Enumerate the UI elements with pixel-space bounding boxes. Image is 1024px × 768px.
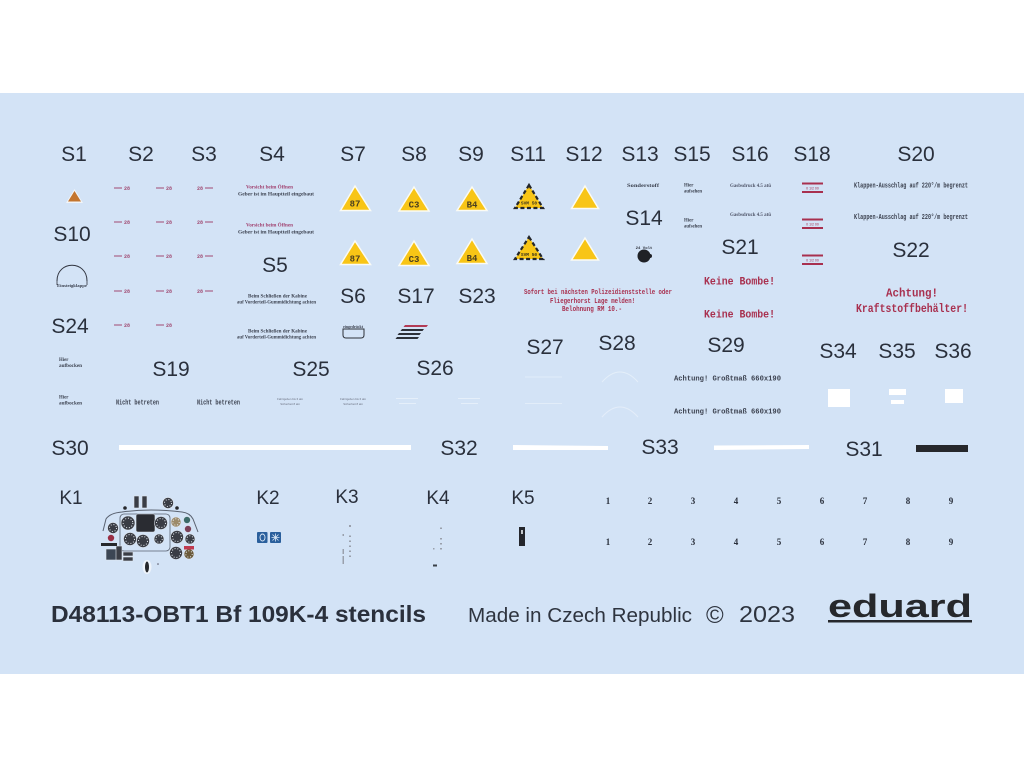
S23 red police notice: Sofort bei nächsten Polizeidienststelle oder	[524, 289, 672, 297]
S29 text: Achtung! Großtmaß 660x190	[674, 408, 781, 416]
item labels: S20	[897, 143, 935, 166]
item labels: S18	[793, 143, 831, 166]
item labels: K3	[335, 487, 359, 508]
S2 and S3 marks: 28	[197, 186, 203, 192]
item labels: S8	[401, 143, 427, 166]
item labels: S31	[845, 438, 883, 461]
S25 small text: Fahrtgeben bis 6 atü	[340, 397, 366, 401]
placard numbers: 9	[949, 496, 954, 506]
item labels: S17	[397, 285, 435, 308]
origin text: Made in Czech Republic	[468, 605, 692, 627]
S19 text	[116, 400, 240, 408]
item labels: S34	[819, 340, 857, 363]
placard numbers: 7	[863, 537, 868, 547]
item labels: S35	[878, 340, 916, 363]
S26 faint white text	[396, 398, 480, 404]
placard numbers	[606, 496, 954, 547]
copyright: ©	[706, 602, 724, 629]
S16 text: Gasbsdruck 4.5 atü	[730, 184, 771, 189]
item labels: S19	[152, 358, 190, 381]
item labels: S22	[892, 239, 930, 262]
S20 text	[854, 182, 968, 222]
S2 and S3 marks: 28	[166, 289, 172, 295]
S13 text: Sonderstoff	[627, 183, 659, 189]
S2 and S3 marks: 28	[166, 323, 172, 329]
item labels	[51, 143, 972, 509]
S7 S8 S9 fuel triangles: B4	[467, 254, 478, 264]
S15 text: Hier	[684, 218, 694, 224]
S2 and S3 marks: 28	[124, 254, 130, 260]
S2 and S3 marks: 28	[166, 254, 172, 260]
placard numbers: 6	[820, 496, 825, 506]
placard numbers: 9	[949, 537, 954, 547]
item labels: S27	[526, 336, 564, 359]
S2 and S3 marks: 28	[197, 289, 203, 295]
item labels: S24	[51, 315, 89, 338]
S16 text: Gasbsdruck 4.5 atü	[730, 213, 771, 218]
S34 S35 S36 white patches	[828, 389, 963, 407]
S10 canopy decal: Einsteigklappe	[57, 283, 87, 288]
S11 dashed triangles: SVM 50	[521, 252, 537, 258]
S7 S8 S9 fuel triangles: C3	[409, 200, 419, 210]
placard numbers: 5	[777, 537, 782, 547]
item labels: S29	[707, 334, 745, 357]
item labels: S6	[340, 285, 366, 308]
item labels: S10	[53, 223, 91, 246]
S10 canopy decal	[57, 265, 87, 288]
item labels: S13	[621, 143, 659, 166]
item labels: K1	[59, 488, 83, 509]
K2 blue dials	[257, 532, 281, 543]
placard numbers: 2	[648, 537, 653, 547]
S25 small text	[277, 397, 366, 406]
S6 canopy outline	[343, 324, 364, 338]
S24 text: Hier	[59, 396, 69, 400]
item labels: S1	[61, 143, 87, 166]
item labels: S16	[731, 143, 769, 166]
S19 text: Nicht betreten	[116, 400, 159, 408]
S29 text	[674, 376, 781, 416]
item labels: S12	[565, 143, 603, 166]
S18 red bars: 0 1/2 00	[806, 222, 819, 226]
S23 red police notice: Belohnung RM 10.-	[562, 306, 622, 314]
S23 red police notice: Fliegerhorst Lage melden!	[550, 298, 635, 306]
item labels: S7	[340, 143, 366, 166]
item labels: S36	[934, 340, 972, 363]
S5 canopy text: Beim Schließen der Kabine	[248, 330, 307, 334]
placard numbers: 2	[648, 496, 653, 506]
K4 small marks	[433, 528, 442, 566]
S4 warning text	[238, 184, 314, 236]
S7 S8 S9 fuel triangles: 87	[350, 254, 360, 264]
S7 S8 S9 fuel triangles: 87	[350, 200, 360, 210]
S31 black strip	[916, 445, 968, 452]
S4 warning text: Vorsicht beim Öffnen	[246, 184, 293, 190]
S5 canopy text	[237, 294, 316, 340]
S22 red warning	[856, 286, 968, 316]
S23 red police notice	[524, 289, 672, 314]
S2 and S3 marks: 28	[124, 220, 130, 226]
S20 text: Klappen-Ausschlag auf 220°/m begrenzt	[854, 182, 968, 190]
S14 black disc	[636, 246, 653, 262]
S25 small text: Fahrtgeben bis 6 atü	[277, 397, 303, 401]
S24 text	[59, 358, 82, 406]
S7 S8 S9 fuel triangles	[340, 186, 487, 266]
S17 striped marks	[396, 325, 428, 339]
K1 instrument panel	[101, 496, 198, 574]
S20 text: Klappen-Ausschlag auf 220°/m begrenzt	[854, 213, 968, 222]
S5 canopy text: auf Vorderteil-Gummidichtung achten	[237, 336, 316, 340]
S11 dashed triangles: SVM 50	[521, 200, 537, 206]
S15 text: Hier	[684, 184, 694, 188]
S5 canopy text: Beim Schließen der Kabine	[248, 294, 307, 300]
S2 and S3 marks: 28	[124, 289, 130, 295]
decal sheet background	[0, 93, 1024, 674]
S2 and S3 marks: 28	[124, 186, 130, 192]
item labels: S5	[262, 254, 288, 277]
S21 red warning: Keine Bombe!	[704, 276, 775, 288]
S24 text: Hier	[59, 358, 69, 363]
year: 2023	[739, 601, 795, 627]
item labels: S26	[416, 357, 454, 380]
S14 black disc: 24 Volt	[636, 246, 653, 251]
S4 warning text: Vorsicht beim Öffnen	[246, 222, 293, 228]
S22 red warning: Kraftstoffbehälter!	[856, 302, 968, 316]
item labels: S4	[259, 143, 285, 166]
S25 small text: Sicherheit 8 atü	[343, 402, 363, 406]
item labels: S9	[458, 143, 484, 166]
item labels: S21	[721, 236, 759, 259]
S4 warning text: Geber ist im Hauptteil eingebaut	[238, 230, 314, 236]
S2 and S3 marks: 28	[197, 254, 203, 260]
placard numbers: 3	[691, 537, 696, 547]
S7 S8 S9 fuel triangles: C3	[409, 255, 419, 265]
placard numbers: 4	[734, 496, 739, 506]
S2 and S3 marks: 28	[197, 220, 203, 226]
S11 dashed triangles	[515, 185, 543, 259]
S2 and S3 marks: 28	[124, 323, 130, 329]
item labels: K2	[256, 488, 280, 509]
K3 small marks	[342, 525, 351, 564]
S19 text: Nicht betreten	[197, 400, 240, 408]
placard numbers: 6	[820, 537, 825, 547]
S4 warning text: Geber ist im Hauptteil eingebaut	[238, 192, 314, 198]
S21 red warning: Keine Bombe!	[704, 310, 775, 322]
S22 red warning: Achtung!	[886, 286, 938, 300]
S6 canopy outline: eingedrückt	[343, 324, 364, 329]
item labels: S32	[440, 437, 478, 460]
placard numbers: 8	[906, 537, 911, 547]
placard numbers: 4	[734, 537, 739, 547]
K5 dark panel	[519, 527, 525, 546]
placard numbers: 1	[606, 496, 611, 506]
S7 S8 S9 fuel triangles: B4	[467, 200, 478, 210]
S2 and S3 marks	[114, 186, 213, 329]
S21 red warning	[704, 276, 775, 322]
item labels: S33	[641, 436, 679, 459]
S12 plain triangles	[572, 186, 598, 260]
S25 small text: Sicherheit 8 atü	[280, 402, 300, 406]
S28 faint white arcs	[602, 372, 638, 417]
S29 text: Achtung! Großtmaß 660x190	[674, 376, 781, 384]
item labels: K5	[511, 488, 535, 509]
S18 red bars: 0 1/2 00	[806, 258, 819, 262]
item labels: K4	[426, 488, 450, 509]
S2 and S3 marks: 28	[166, 186, 172, 192]
placard numbers: 7	[863, 496, 868, 506]
S15 text: aufsehen	[684, 224, 702, 230]
placard numbers: 1	[606, 537, 611, 547]
S24 text: aufbocken	[59, 364, 82, 369]
item labels: S28	[598, 332, 636, 355]
item labels: S14	[625, 207, 663, 230]
S16 text	[730, 184, 771, 218]
S2 and S3 marks: 28	[166, 220, 172, 226]
item labels: S30	[51, 437, 89, 460]
S27 faint white lines	[525, 376, 562, 404]
item labels: S2	[128, 143, 154, 166]
item labels: S23	[458, 285, 496, 308]
item labels: S11	[510, 143, 546, 166]
S15 text	[684, 184, 702, 230]
S18 red bars: 0 1/2 00	[806, 186, 819, 190]
S24 text: aufbocken	[59, 402, 82, 406]
sheet title: D48113-OBT1 Bf 109K-4 stencils	[51, 601, 426, 627]
item labels: S3	[191, 143, 217, 166]
S18 red bars	[802, 182, 823, 265]
placard numbers: 8	[906, 496, 911, 506]
S5 canopy text: auf Vorderteil-Gummidichtung achten	[237, 300, 316, 306]
item labels: S25	[292, 358, 330, 381]
placard numbers: 3	[691, 496, 696, 506]
S1 triangle decal	[66, 189, 83, 203]
placard numbers: 5	[777, 496, 782, 506]
eduard logo: eduard	[828, 588, 972, 624]
item labels: S15	[673, 143, 711, 166]
S15 text: aufsehen	[684, 190, 702, 194]
S30 S32 S33 white strips	[119, 445, 809, 450]
